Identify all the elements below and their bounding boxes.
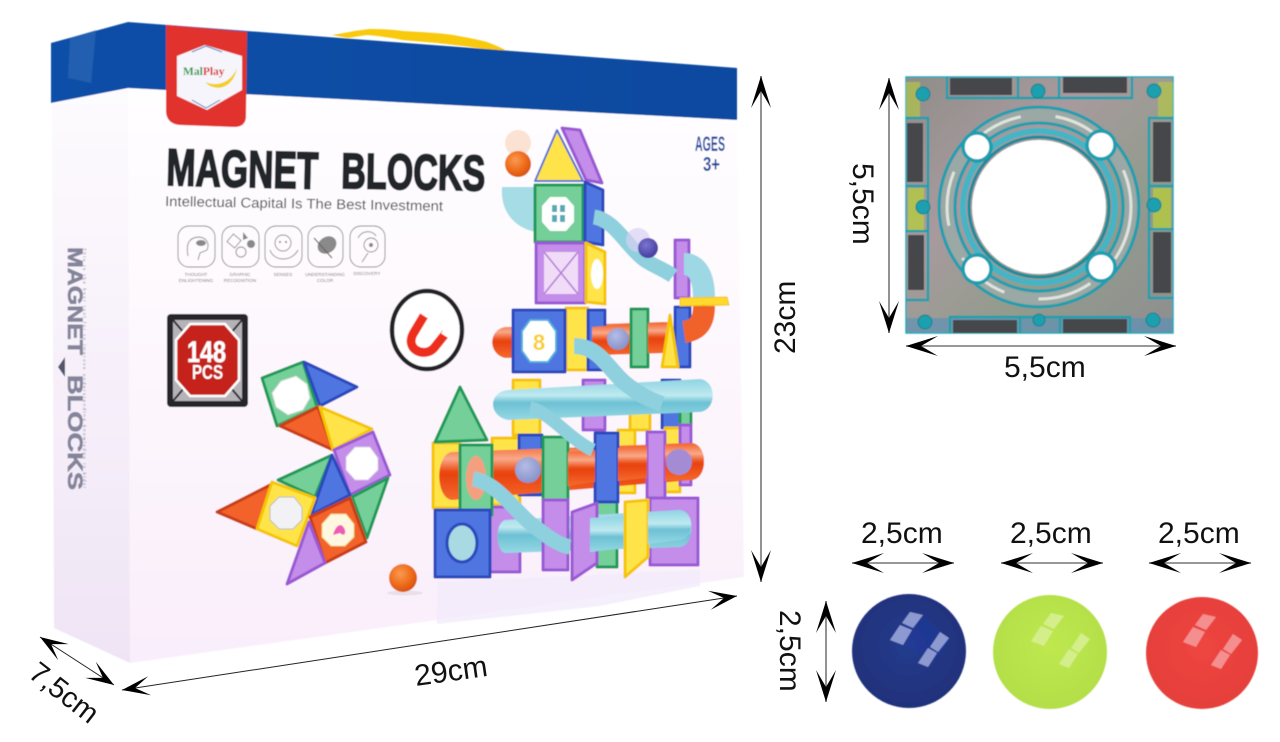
piece count badge: PCS bbox=[192, 362, 223, 384]
dimension: ball height bbox=[773, 601, 826, 702]
side panel title: MAGNET bbox=[63, 247, 86, 355]
loose orange ball bbox=[387, 564, 423, 596]
icon: discovery: DISCOVERY bbox=[354, 271, 380, 276]
dimension: red ball width: 2,5cm bbox=[1158, 517, 1240, 550]
icon: understanding color: UNDERSTANDING bbox=[305, 272, 345, 277]
blue top band bbox=[51, 22, 737, 120]
box front face bbox=[128, 88, 744, 663]
green ball bbox=[993, 595, 1107, 709]
dimension: blue ball width: 2,5cm bbox=[861, 517, 943, 550]
icon: discovery bbox=[350, 226, 385, 276]
dimension: green ball width bbox=[1001, 517, 1103, 563]
brand tab: MalPlay bbox=[183, 66, 225, 78]
side panel title bbox=[58, 247, 87, 490]
blue ball bbox=[852, 594, 966, 708]
icon: thought enlightening: THOUGHT bbox=[185, 272, 208, 277]
box side panel bbox=[52, 88, 130, 663]
marble run tower bbox=[433, 128, 729, 624]
icon: thought enlightening bbox=[178, 226, 215, 283]
back tiles bbox=[490, 380, 698, 572]
piece count badge bbox=[167, 314, 248, 407]
dimension: box width: 29cm bbox=[412, 650, 490, 693]
packaging box bbox=[51, 22, 744, 663]
upper tower tiles bbox=[535, 128, 605, 304]
dimension: box width bbox=[122, 596, 737, 693]
icon: graphic recognition bbox=[222, 226, 259, 283]
carry handle bbox=[332, 29, 507, 51]
balls and upper slide bbox=[505, 130, 673, 276]
flat tile bird shape bbox=[217, 362, 390, 584]
icon: understanding color: COLOR bbox=[317, 278, 334, 283]
side panel title: BLOCKS bbox=[63, 375, 86, 490]
dimension: box depth: 7,5cm bbox=[23, 656, 105, 730]
icon: senses: SENSES bbox=[274, 272, 292, 277]
age badge: 3+ bbox=[703, 154, 720, 176]
main title: BLOCKS bbox=[341, 143, 486, 202]
bottom tiles bbox=[435, 479, 691, 580]
panel: square tile bbox=[906, 77, 1173, 333]
lower slide bbox=[574, 346, 662, 404]
magnet emblem bbox=[392, 291, 462, 369]
icon: senses bbox=[265, 226, 302, 277]
dimension: ball height: 2,5cm bbox=[773, 610, 806, 692]
dimension: red ball width bbox=[1149, 517, 1251, 563]
icon: graphic recognition: GRAPHIC bbox=[230, 272, 251, 277]
icon: understanding color bbox=[305, 226, 345, 283]
tile ring bbox=[939, 107, 1139, 307]
icon: graphic recognition: RECOGNITION bbox=[224, 278, 256, 283]
curved tube and shelf bbox=[662, 240, 729, 367]
side panel title: This is the best tool for to improve understanding knowledge in kids! bbox=[82, 248, 87, 488]
icon: thought enlightening: ENLIGHTENING bbox=[179, 278, 214, 283]
ground reflection bbox=[437, 570, 700, 624]
middle panels bbox=[433, 387, 704, 515]
tagline: Intellectual Capital Is The Best Investment bbox=[165, 193, 443, 214]
age badge: AGES bbox=[695, 133, 725, 156]
letter tile: 8 bbox=[533, 330, 545, 355]
letter tile bbox=[513, 310, 565, 372]
dimension: box height: 23cm bbox=[769, 281, 802, 354]
teal tubes bbox=[493, 187, 713, 553]
dimension: tile height: 5,5cm bbox=[846, 163, 879, 245]
brand tab bbox=[166, 25, 247, 127]
red ball bbox=[1146, 597, 1258, 709]
main title: MAGNET bbox=[166, 139, 319, 201]
skill icons row bbox=[178, 226, 385, 283]
dimension: tile width: 5,5cm bbox=[1004, 351, 1086, 384]
orange tube upper bbox=[492, 308, 668, 370]
piece count badge: 148 bbox=[187, 336, 226, 369]
dimension: green ball width: 2,5cm bbox=[1010, 517, 1092, 550]
tile corner holes bbox=[963, 131, 1115, 283]
dimension: blue ball width bbox=[852, 517, 954, 563]
tile frame and magnets bbox=[906, 77, 1173, 333]
age badge bbox=[695, 133, 725, 176]
